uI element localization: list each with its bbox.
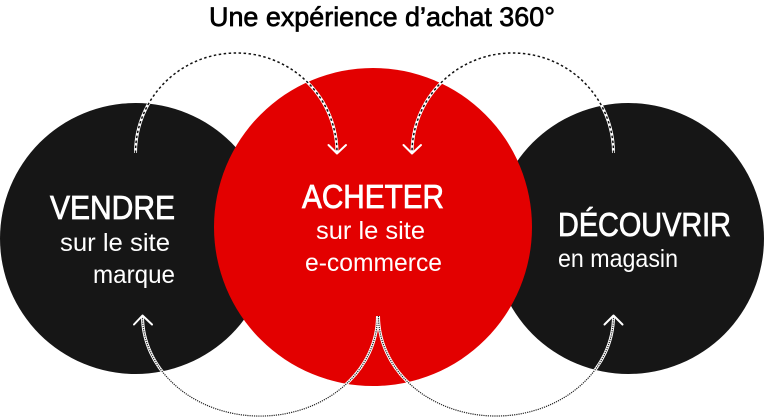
text block: acheter: ACHETER	[302, 178, 444, 215]
text block: acheter: sur le site	[316, 217, 425, 245]
panel: vendre circle	[0, 103, 271, 374]
text block: acheter: e-commerce	[305, 249, 442, 277]
text block: vendre: VENDRE	[50, 189, 175, 226]
panel: découvrir circle	[493, 103, 764, 374]
arrow: acheter to découvrir	[378, 316, 622, 416]
title: Une expérience d’achat 360°	[209, 2, 555, 32]
text block: acheter	[302, 178, 444, 277]
text block: découvrir: en magasin	[558, 245, 678, 273]
text block: découvrir	[558, 206, 731, 273]
text block: vendre	[50, 189, 175, 289]
arrow: découvrir to acheter	[404, 53, 614, 154]
text block: vendre: sur le site	[60, 229, 170, 257]
panel: acheter circle	[214, 68, 532, 386]
text block: vendre: marque	[93, 261, 175, 289]
text block: découvrir: DÉCOUVRIR	[558, 206, 731, 243]
arrow: vendre to acheter	[136, 53, 346, 154]
arrow: acheter to vendre	[134, 316, 378, 416]
